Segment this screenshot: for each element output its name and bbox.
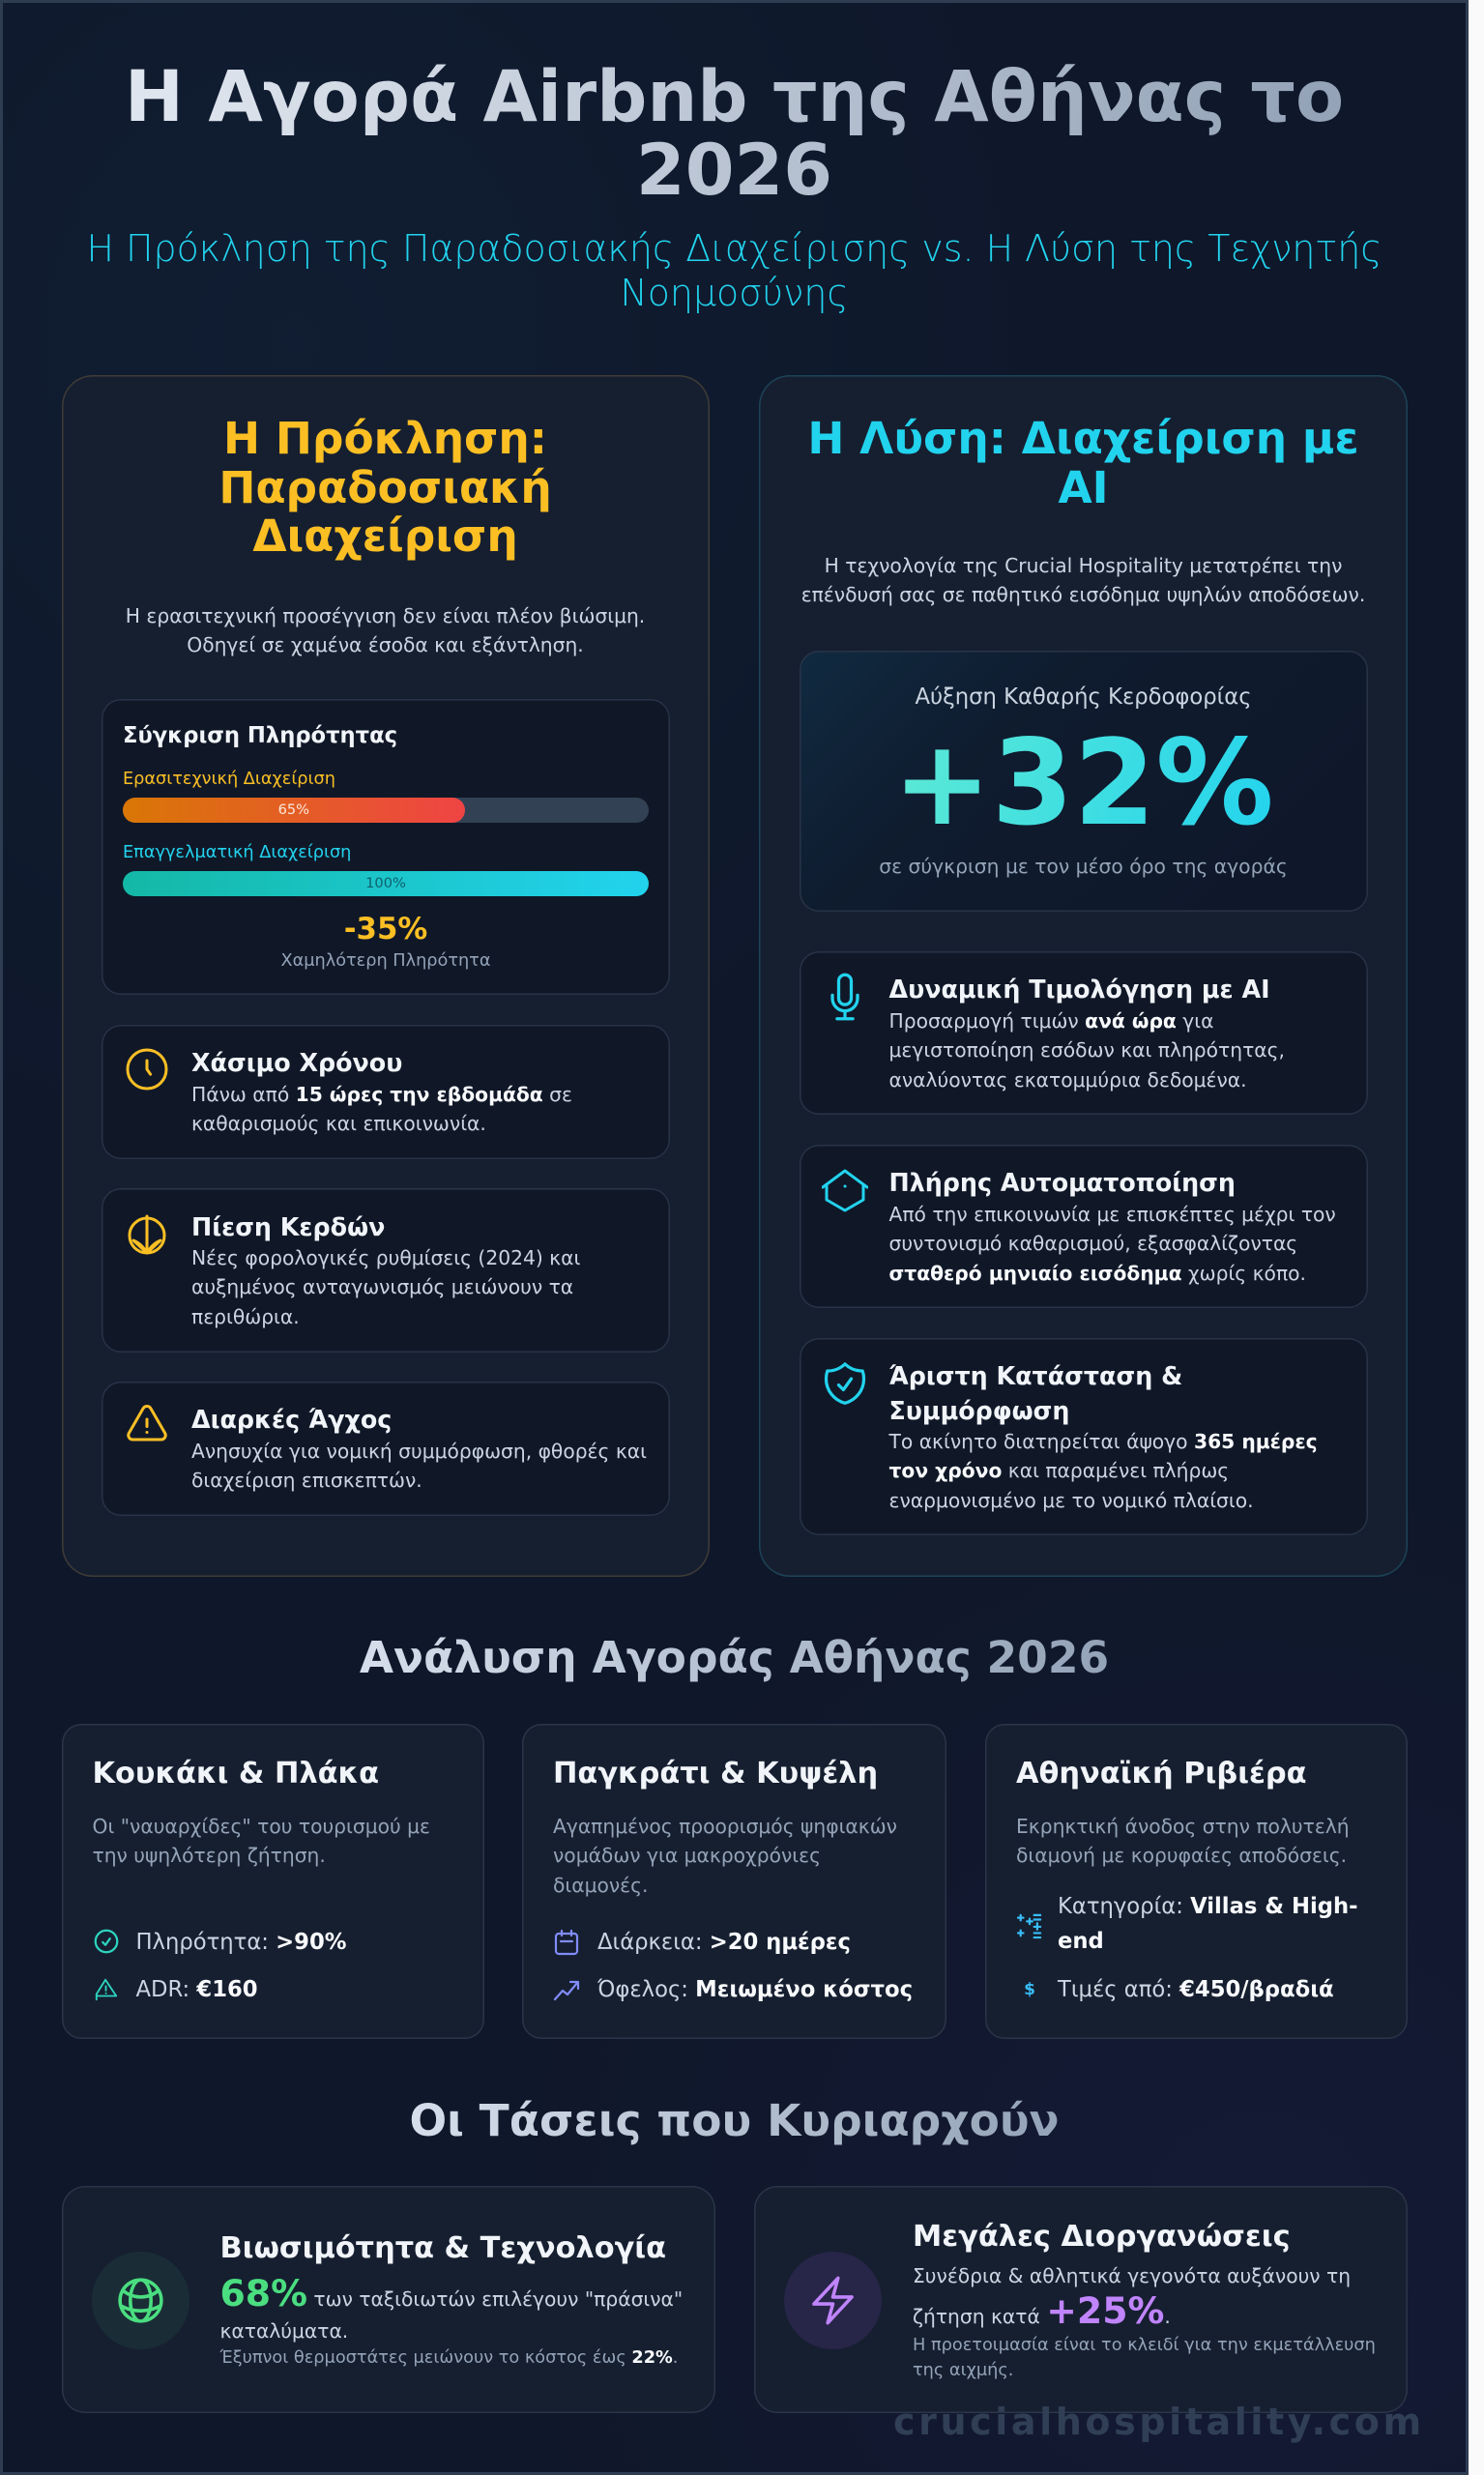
- bar: professional 100%: 100%: [365, 875, 406, 891]
- card: dynamic pricing: [799, 951, 1367, 1115]
- value: Όφελος: Μειωμένο κόστος: [597, 1977, 913, 2002]
- icon: house: [822, 1170, 868, 1212]
- text with +25% stat: [913, 2256, 1351, 2337]
- bar: amateur 65%: [123, 798, 649, 823]
- text: Οι "ναυαρχίδες" του τουρισμού με: [93, 1815, 430, 1838]
- icon: warning triangle: [127, 1405, 167, 1441]
- icon: trending arrow: [553, 1980, 580, 2001]
- heading: market analysis: Ανάλυση Αγοράς Αθήνας 2026: [360, 1632, 1109, 1683]
- value: end: [1058, 1929, 1104, 1954]
- heading: challenge: Η Πρόκληση:: [223, 413, 547, 464]
- value: ADR: €160: [135, 1977, 258, 2002]
- small text: της αιχμής.: [913, 2361, 1013, 2380]
- title: Αθηναϊκή Ριβιέρα: [1016, 1757, 1307, 1791]
- subtitle: Νοημοσύνης: [620, 272, 849, 314]
- stat: duration: [555, 1930, 851, 1955]
- stat: occupancy: [95, 1930, 346, 1955]
- trend card: big events: [754, 2186, 1408, 2413]
- text: Προσαρμογή τιμών ανά ώρα για: [889, 1009, 1213, 1033]
- text: αυξημένος ανταγωνισμός μειώνουν τα: [191, 1275, 573, 1298]
- stat caption: Χαμηλότερη Πληρότητα: [280, 951, 491, 971]
- small text: Η προετοιμασία είναι το κλειδί για την εκμετάλλευση: [913, 2336, 1376, 2355]
- stat: category: [1017, 1894, 1358, 1954]
- stat: -35%: -35%: [344, 912, 427, 946]
- card: constant anxiety: [102, 1382, 670, 1516]
- text: εναρμονισμένο με το νομικό πλαίσιο.: [889, 1489, 1254, 1512]
- text: [888, 1430, 1318, 1512]
- heading: Δυναμική Τιμολόγηση με AI: [889, 975, 1270, 1004]
- card heading: Σύγκριση Πληρότητας: [123, 723, 397, 748]
- stat: benefit: [553, 1977, 913, 2002]
- heading: Χάσιμο Χρόνου: [191, 1048, 402, 1077]
- text: Εκρηκτική άνοδος στην πολυτελή: [1016, 1815, 1350, 1838]
- text: [889, 1009, 1285, 1092]
- text: διαμονές.: [553, 1874, 648, 1897]
- value: Κατηγορία: Villas & High-: [1058, 1894, 1358, 1919]
- icon: lightning bolt: [784, 2251, 882, 2349]
- card: lost time: [102, 1025, 670, 1159]
- note: σε σύγκριση με τον μέσο όρο της αγοράς: [879, 855, 1288, 878]
- label: amateur management: Ερασιτεχνική Διαχείριση: [123, 770, 335, 789]
- title: [62, 61, 1407, 208]
- challenge intro text: Η ερασιτεχνική προσέγγιση δεν είναι πλέον βιώσιμη.: [126, 604, 645, 627]
- title: 2026: [636, 130, 832, 212]
- small text: [913, 2333, 1376, 2383]
- text: μεγιστοποίηση εσόδων και πληρότητας,: [889, 1038, 1285, 1062]
- text: [191, 1083, 572, 1135]
- text with 68% stat: καταλύματα.: [220, 2319, 348, 2343]
- market card: Athenian Riviera: [985, 1724, 1408, 2039]
- text: Αγαπημένος προορισμός ψηφιακών: [553, 1815, 897, 1838]
- icon: shield check: [824, 1362, 866, 1405]
- title: Η Αγορά Airbnb της Αθήνας το: [125, 56, 1344, 138]
- value: Πληρότητα: >90%: [135, 1930, 346, 1955]
- text: αναλύοντας εκατομμύρια δεδομένα.: [889, 1068, 1247, 1092]
- heading: Άριστη Κατάσταση &: [889, 1361, 1182, 1390]
- caption: Αύξηση Καθαρής Κερδοφορίας: [915, 684, 1252, 710]
- title: Παγκράτι & Κυψέλη: [553, 1757, 878, 1791]
- icon: microphone: [830, 973, 859, 1021]
- card: full automation: [799, 1145, 1367, 1308]
- card: compliance: [799, 1338, 1367, 1535]
- value: Τιμές από: €450/βραδιά: [1058, 1977, 1334, 2002]
- text: νομάδων για μακροχρόνιες: [553, 1844, 821, 1867]
- text: την υψηλότερη ζήτηση.: [93, 1844, 326, 1867]
- market card: Koukaki & Plaka: [62, 1724, 483, 2039]
- heading: challenge: Παραδοσιακή: [218, 462, 552, 512]
- solution intro text: επένδυσή σας σε παθητικό εισόδημα υψηλών αποδόσεων.: [801, 583, 1365, 606]
- solution intro text: Η τεχνολογία της Crucial Hospitality μετατρέπει την: [825, 554, 1342, 577]
- icon: check circle: [95, 1930, 118, 1953]
- trend card: sustainability: [62, 2186, 715, 2413]
- icon: tag: [95, 1978, 118, 2001]
- big stat +32%: +32%: [892, 714, 1274, 852]
- text: Νέες φορολογικές ρυθμίσεις (2024) και: [191, 1246, 580, 1269]
- icon: scale: [128, 1214, 166, 1255]
- text with 68% stat: 68% των ταξιδιωτών επιλέγουν "πράσινα": [220, 2272, 683, 2315]
- text: [191, 1246, 580, 1328]
- text: συντονισμό καθαρισμού, εξασφαλίζοντας: [889, 1232, 1297, 1255]
- text: καθαρισμούς και επικοινωνία.: [191, 1112, 486, 1135]
- solution intro text: [801, 554, 1365, 606]
- bar: amateur 65%: 65%: [278, 801, 309, 818]
- panel: the solution: [759, 375, 1408, 1577]
- subtitle: Η Πρόκληση της Παραδοσιακής Διαχείρισης vs. Η Λύση της Τεχνητής: [87, 227, 1382, 270]
- icon: clock: [126, 1048, 168, 1091]
- heading: Πίεση Κερδών: [191, 1212, 385, 1241]
- title: Βιωσιμότητα & Τεχνολογία: [220, 2231, 666, 2265]
- text: [553, 1815, 897, 1897]
- challenge intro text: [126, 604, 645, 656]
- heading: challenge: [218, 413, 552, 562]
- text: τον χρόνο και παραμένει πλήρως: [889, 1459, 1229, 1482]
- panel: the challenge: [62, 375, 710, 1577]
- text with +25% stat: ζήτηση κατά +25%.: [913, 2289, 1171, 2332]
- icon: calendar: [555, 1930, 578, 1955]
- text: διαμονή με κορυφαίες αποδόσεις.: [1016, 1844, 1347, 1867]
- text with 68% stat: [220, 2284, 683, 2347]
- title: Μεγάλες Διοργανώσεις: [913, 2220, 1291, 2254]
- watermark: crucialhospitality.com: [893, 2401, 1425, 2443]
- icon: dollar: $: [1024, 1980, 1035, 1999]
- stat: ADR: [95, 1977, 258, 2002]
- text: [191, 1440, 647, 1492]
- text: Πάνω από 15 ώρες την εβδομάδα σε: [191, 1083, 572, 1106]
- stat: prices: [1024, 1977, 1334, 2002]
- icon: globe: [91, 2251, 189, 2349]
- challenge intro text: Οδηγεί σε χαμένα έσοδα και εξάντληση.: [187, 633, 584, 656]
- title: Κουκάκι & Πλάκα: [93, 1757, 379, 1791]
- heading: [889, 1361, 1182, 1425]
- small text: Έξυπνοι θερμοστάτες μειώνουν το κόστος έως 22%.: [220, 2348, 678, 2368]
- text: διαχείριση επισκεπτών.: [191, 1469, 422, 1492]
- heading: Διαρκές Άγχος: [191, 1405, 392, 1434]
- label: professional management: Επαγγελματική Διαχείριση: [123, 843, 351, 862]
- heading: dominant trends: Οι Τάσεις που Κυριαρχούν: [409, 2095, 1060, 2146]
- market card: Pagrati & Kypseli: [522, 1724, 946, 2039]
- heading: solution: AI: [1058, 462, 1109, 512]
- text: [93, 1815, 430, 1867]
- bar: professional 100%: [123, 871, 649, 896]
- text with +25% stat: Συνέδρια & αθλητικά γεγονότα αυξάνουν τη: [913, 2264, 1351, 2287]
- heading: Συμμόρφωση: [889, 1396, 1069, 1425]
- heading: challenge: Διαχείριση: [252, 510, 518, 562]
- text: [1016, 1815, 1350, 1867]
- text: σταθερό μηνιαίο εισόδημα χωρίς κόπο.: [889, 1262, 1306, 1285]
- card: net profit increase: [799, 651, 1367, 912]
- heading: solution: [807, 413, 1359, 512]
- value: [1058, 1894, 1358, 1954]
- subtitle: [87, 227, 1382, 314]
- text: Το ακίνητο διατηρείται άψογο 365 ημέρες: [889, 1430, 1318, 1453]
- occupancy comparison card: [102, 699, 670, 995]
- text: Ανησυχία για νομική συμμόρφωση, φθορές και: [191, 1440, 647, 1463]
- text: [889, 1203, 1336, 1285]
- value: Διάρκεια: >20 ημέρες: [597, 1930, 851, 1955]
- text: Από την επικοινωνία με επισκέπτες μέχρι τον: [889, 1203, 1336, 1226]
- text: περιθώρια.: [191, 1305, 300, 1328]
- card: profit pressure: [102, 1188, 670, 1353]
- heading: solution: Η Λύση: Διαχείριση με: [807, 413, 1359, 464]
- icon: sparkles: [1017, 1914, 1042, 1939]
- heading: Πλήρης Αυτοματοποίηση: [889, 1168, 1236, 1197]
